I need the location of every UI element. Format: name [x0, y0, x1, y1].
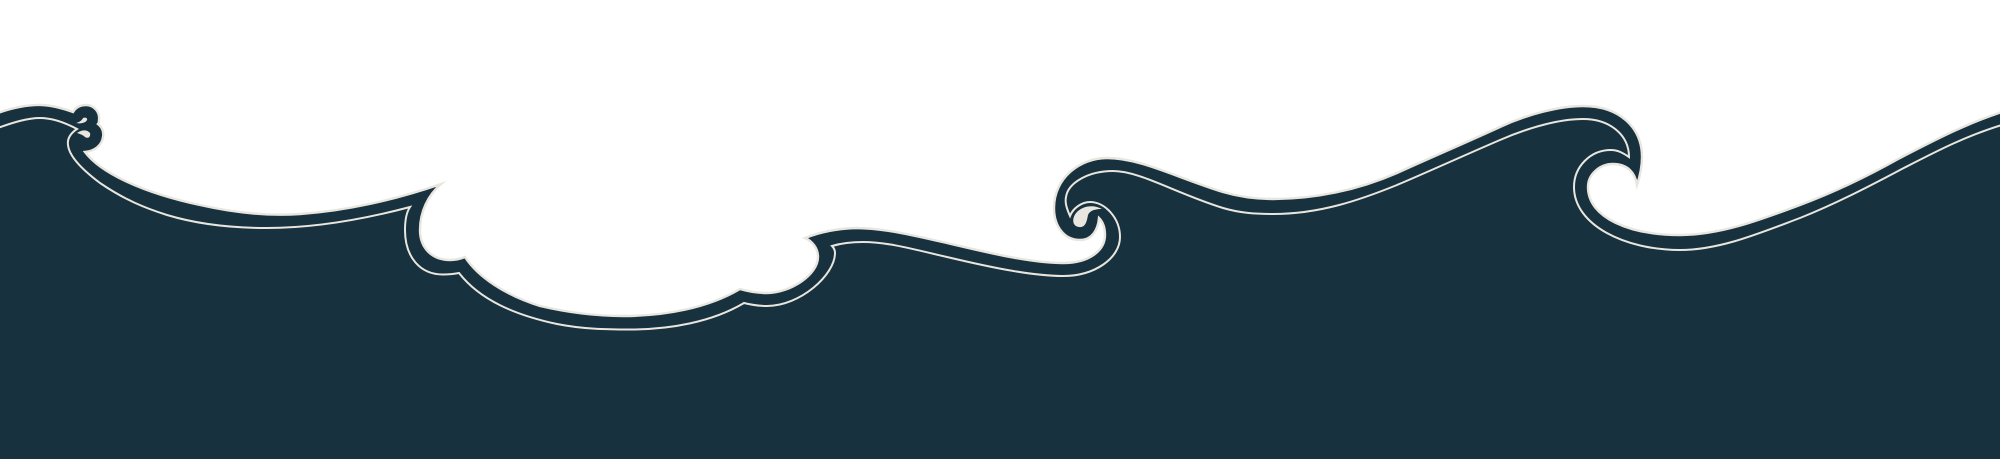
- icon: foam drop in central curl: [1073, 206, 1102, 227]
- wave body with pale outline: [0, 105, 2000, 459]
- icon: upper foam drop in left curl: [76, 118, 87, 123]
- icon: lower foam drop in left curl: [77, 130, 90, 138]
- inner contour line: [0, 118, 2000, 330]
